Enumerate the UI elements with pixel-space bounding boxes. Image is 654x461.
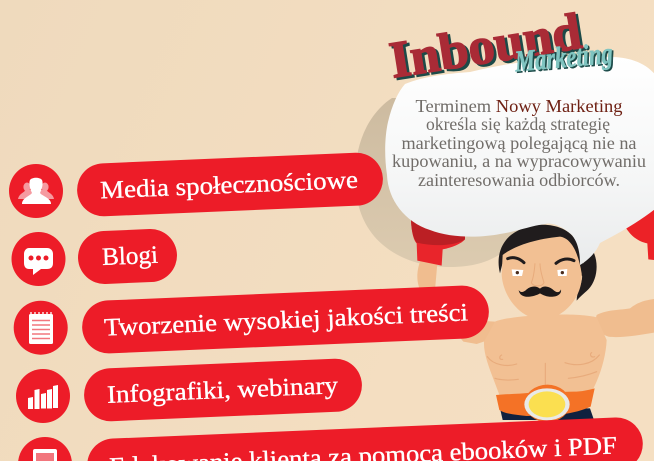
pill <box>86 416 644 461</box>
intro text: marketingową polegającą nie na <box>402 133 637 153</box>
title: Inbound: Inbound <box>386 3 585 90</box>
item 4: infographics <box>16 358 363 423</box>
pill <box>83 358 363 422</box>
nose <box>531 263 544 286</box>
intro text: kupowaniu, a na wypracowywaniu <box>392 151 646 171</box>
intro text: zainteresowania odbiorców. <box>418 170 620 190</box>
speech cloud <box>385 57 654 265</box>
pill <box>76 152 384 217</box>
right arm <box>596 299 654 337</box>
icon: tablet <box>18 437 72 461</box>
label: Blogi <box>101 242 159 271</box>
item 1: social media <box>9 152 384 218</box>
item 3: content <box>14 285 490 355</box>
label: Tworzenie wysokiej jakości treści <box>104 299 468 342</box>
label: Media społecznościowe <box>100 167 358 204</box>
intro text: określa się każdą strategię <box>426 114 610 134</box>
icon: speech bubble <box>12 232 66 286</box>
icon: bar chart <box>16 369 70 423</box>
hair right side <box>577 252 597 301</box>
title: Marketing: Marketing <box>513 37 614 78</box>
left arm <box>417 260 495 344</box>
torso <box>484 314 607 397</box>
title: Marketing: Marketing <box>514 38 616 80</box>
chest lines <box>487 353 599 385</box>
pill <box>81 285 490 354</box>
hair back <box>499 225 587 277</box>
label: Infografiki, webinary <box>107 372 339 409</box>
moustache <box>519 286 561 297</box>
icon: people <box>9 164 63 218</box>
trousers <box>500 408 594 420</box>
cloud shadow <box>355 98 520 267</box>
eyes <box>512 269 567 276</box>
item 2: blogs <box>12 228 178 286</box>
boxer figure <box>411 210 654 422</box>
title: Inbound: Inbound <box>389 5 588 92</box>
eyebrows <box>508 258 574 263</box>
intro text <box>392 96 646 190</box>
belt <box>496 385 595 422</box>
face <box>502 237 582 319</box>
item 5: education <box>18 416 644 461</box>
icon: notepad <box>14 301 68 355</box>
left glove <box>411 217 465 266</box>
right glove <box>623 210 654 260</box>
intro text: Terminem Nowy Marketing <box>416 96 623 116</box>
pill <box>77 228 178 285</box>
